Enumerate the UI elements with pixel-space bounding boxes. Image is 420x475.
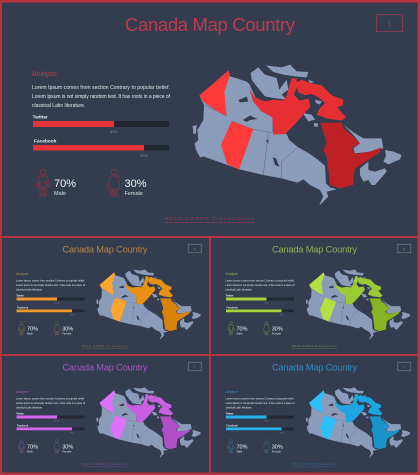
stat: female: 30% — [62, 444, 73, 450]
body text — [226, 280, 295, 292]
stat: female: Female — [62, 332, 72, 336]
stat: female: 30% — [272, 444, 283, 450]
stat: male: 70% — [27, 444, 38, 450]
page number box — [188, 244, 201, 253]
stat: female: 30% — [272, 326, 283, 332]
body text: classical Latin literature. — [226, 288, 252, 292]
stat: male: 70% — [27, 326, 38, 332]
body text: Lorem Ipsum comes from section Contrary to popular belief. — [16, 398, 85, 400]
body text: Lorem Ipsum is not simply random text. It has roots in a piece of — [226, 284, 295, 287]
footer caption: BOLD CORPS Presentation — [82, 345, 128, 348]
heading: analyze: Analyze — [16, 272, 29, 276]
body text: Lorem Ipsum is not simply random text. It has roots in a piece of — [226, 402, 295, 405]
bar chart: twitter: Twitter — [16, 294, 24, 297]
body text — [16, 398, 85, 410]
body text: Lorem Ipsum is not simply random text. It has roots in a piece of — [32, 94, 171, 100]
map of Canada — [96, 387, 201, 458]
body text: classical Latin literature. — [32, 103, 85, 109]
body text: Lorem Ipsum is not simply random text. It has roots in a piece of — [16, 284, 85, 287]
body text: classical Latin literature. — [226, 406, 252, 410]
page number box — [376, 14, 402, 32]
page number box: 1 — [194, 247, 196, 251]
page number box: 1 — [403, 247, 405, 251]
heading: analyze: Analyze — [226, 390, 238, 394]
bar chart: facebook: Facebook — [226, 424, 238, 427]
page number box: 1 — [388, 22, 392, 28]
bar chart: twitter: 60% — [55, 420, 59, 422]
title: Canada Map Country — [62, 244, 148, 254]
bar chart: twitter: Twitter — [226, 294, 233, 297]
stat: male: Male — [54, 191, 66, 197]
heading: analyze: Analyze — [16, 390, 29, 394]
stat: male — [18, 322, 38, 336]
stat: male — [18, 440, 38, 454]
page number box — [188, 362, 201, 371]
bar chart: facebook — [33, 138, 169, 158]
stat: male: Male — [236, 332, 243, 336]
stat: female: 30% — [62, 326, 73, 332]
bar chart: facebook: 85% — [279, 314, 284, 316]
title: Canada Map Country — [272, 244, 357, 254]
panel: purple slide — [16, 362, 201, 466]
title: Canada Map Country — [125, 14, 296, 35]
bar chart: twitter — [226, 294, 294, 304]
page number box: 1 — [403, 365, 405, 369]
body text: Lorem Ipsum comes from section Contrary to popular belief. — [226, 280, 295, 282]
bar chart: facebook: 85% — [70, 432, 74, 434]
bar chart: facebook: Facebook — [17, 306, 29, 309]
page number box — [398, 244, 411, 253]
heading: analyze: Analyze — [32, 71, 57, 78]
body text: classical Latin literature. — [16, 406, 43, 410]
bar chart: twitter — [16, 294, 84, 304]
stat: female — [108, 169, 147, 197]
page number box: 1 — [194, 365, 196, 369]
bar chart: twitter: Twitter — [32, 114, 48, 120]
bar chart: facebook: 85% — [140, 153, 148, 158]
bar chart: twitter: Twitter — [226, 412, 233, 415]
body text: Lorem Ipsum comes from section Contrary to popular belief. — [32, 85, 170, 91]
bar chart: facebook — [16, 306, 84, 316]
bar chart: twitter — [16, 412, 84, 422]
heading: analyze: Analyze — [226, 272, 238, 276]
stat: female: 30% — [124, 178, 147, 190]
footer caption — [292, 345, 337, 348]
stat: male — [228, 440, 248, 454]
panel: green slide — [226, 244, 411, 348]
bar chart: facebook: 85% — [279, 432, 284, 434]
body text: classical Latin literature. — [16, 288, 43, 292]
page number box — [398, 362, 411, 371]
bar chart: twitter — [226, 412, 294, 422]
bar chart: twitter: 60% — [264, 302, 269, 304]
stat: male: 70% — [54, 178, 76, 190]
stat: female — [54, 322, 73, 336]
stat: female: Female — [272, 332, 281, 336]
bar chart: twitter: 60% — [110, 129, 118, 134]
footer caption: BOLD CORPS Presentation — [292, 345, 337, 348]
panel: blue slide — [226, 362, 411, 466]
body text: Lorem Ipsum comes from section Contrary to popular belief. — [226, 398, 295, 400]
stat: male — [36, 169, 76, 197]
body text: Lorem Ipsum comes from section Contrary to popular belief. — [16, 280, 85, 282]
bar chart: twitter: 60% — [264, 420, 269, 422]
bar chart: facebook: Facebook — [34, 138, 57, 144]
stat: male: 70% — [236, 326, 248, 332]
stat: female — [54, 440, 73, 454]
body text — [32, 85, 171, 109]
bar chart: twitter: 60% — [55, 302, 59, 304]
map of Canada — [96, 269, 201, 340]
stat: female: Female — [62, 450, 72, 454]
stat: male: Male — [27, 450, 33, 454]
bar chart: twitter — [32, 114, 169, 134]
map of Canada — [193, 65, 402, 206]
stat: female — [264, 322, 283, 336]
bar chart: twitter: Twitter — [16, 412, 24, 415]
body text: Lorem Ipsum is not simply random text. It has roots in a piece of — [16, 402, 85, 405]
map of Canada — [306, 387, 410, 458]
bar chart: facebook — [226, 424, 294, 434]
stat: female: Female — [124, 191, 143, 197]
panel: orange slide — [16, 244, 201, 348]
stat: male: Male — [236, 450, 243, 454]
title: Canada Map Country — [272, 362, 357, 372]
body text — [226, 398, 295, 410]
stat: female: Female — [272, 450, 281, 454]
footer caption: BOLD CORPS Presentation — [292, 463, 337, 466]
bar chart: facebook: Facebook — [226, 306, 238, 309]
footer caption: BOLD CORPS Presentation — [165, 216, 254, 221]
bar chart: facebook — [16, 424, 84, 434]
stat: male — [228, 322, 248, 336]
stat: male: 70% — [236, 444, 248, 450]
stat: male: Male — [27, 332, 33, 336]
title: Canada Map Country — [62, 362, 148, 372]
bar chart: facebook — [226, 306, 294, 316]
footer caption: BOLD CORPS Presentation — [82, 463, 128, 466]
footer caption — [82, 463, 128, 466]
footer caption — [292, 463, 337, 466]
stat: female — [264, 440, 283, 454]
body text — [16, 280, 85, 292]
panel: red main slide — [32, 14, 402, 223]
bar chart: facebook: 85% — [70, 314, 74, 316]
bar chart: facebook: Facebook — [17, 424, 29, 427]
footer caption — [82, 345, 128, 348]
map of Canada — [306, 269, 410, 340]
